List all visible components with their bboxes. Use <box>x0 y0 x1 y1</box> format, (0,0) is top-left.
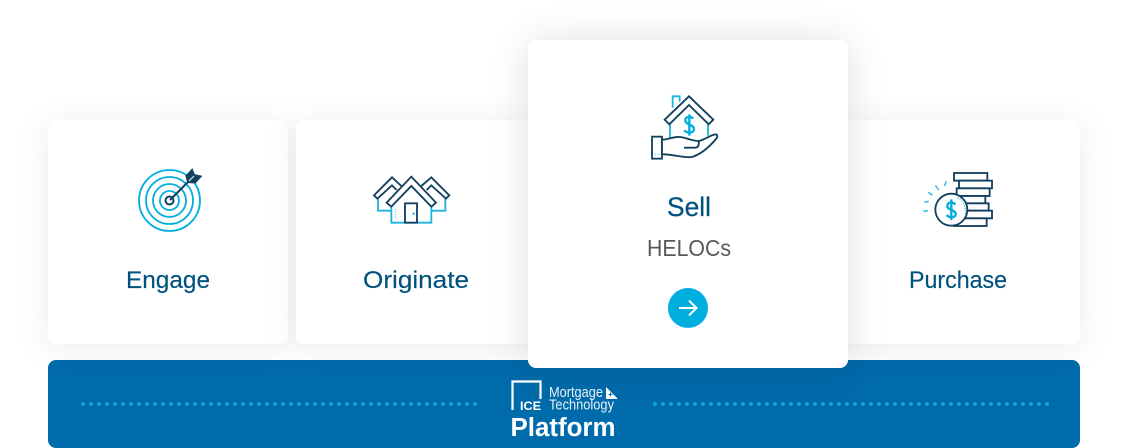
logo: ICE Mortgage Technology: Technology <box>549 398 615 414</box>
label: purchase: Purchase <box>909 267 1007 294</box>
label: originate: Originate <box>363 267 469 294</box>
label: sell: Sell <box>667 192 711 222</box>
panel: engage card <box>48 120 288 344</box>
icon: house in hand <box>652 96 717 159</box>
logo: ICE Mortgage Technology <box>512 382 618 414</box>
icon: arrow button <box>668 288 708 328</box>
panel: originate card <box>296 120 536 344</box>
logo: ICE Mortgage Technology: ICE <box>520 399 541 413</box>
panel: sell card <box>528 40 848 368</box>
icon: coins <box>923 173 992 226</box>
label: engage: Engage <box>126 267 210 294</box>
dotted line right <box>655 402 1048 406</box>
icon: houses <box>374 177 449 223</box>
label: helocs: HELOCs <box>647 235 731 261</box>
label: platform: Platform <box>510 414 616 442</box>
icon: target with arrow <box>139 170 200 231</box>
logo: ICE Mortgage Technology: Mortgage <box>549 385 603 401</box>
dotted line left <box>83 402 476 406</box>
panel: platform bar <box>48 360 1080 448</box>
panel: purchase card <box>840 120 1080 344</box>
